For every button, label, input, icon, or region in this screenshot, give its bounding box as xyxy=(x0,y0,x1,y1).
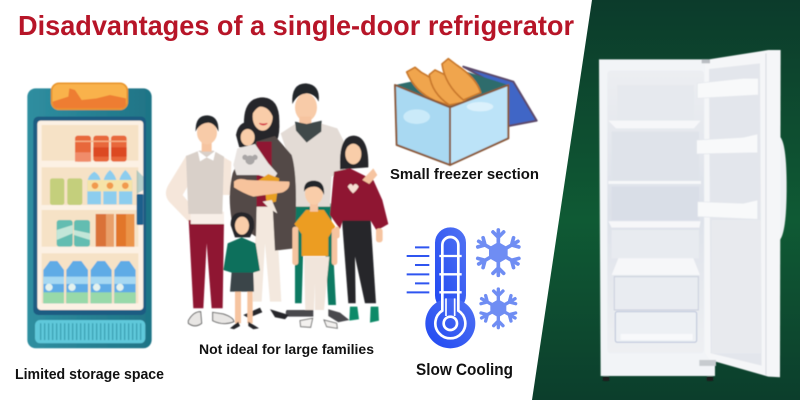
icon: thermometer and snowflakes xyxy=(407,227,521,348)
boy xyxy=(292,181,337,328)
label: slow cooling: Slow Cooling xyxy=(416,361,513,379)
orange cartons xyxy=(96,214,134,247)
icon: freezer box with fish xyxy=(395,59,537,165)
label: not ideal for large families: Not ideal for large families xyxy=(199,341,374,357)
fish xyxy=(407,59,481,105)
man on the left xyxy=(166,115,234,326)
cabinet xyxy=(599,59,715,376)
mother xyxy=(230,97,296,319)
small girl xyxy=(223,212,260,329)
door handle xyxy=(779,136,787,241)
door bins xyxy=(697,78,758,219)
baby xyxy=(233,122,289,213)
father xyxy=(281,83,349,322)
small snowflake xyxy=(479,289,517,328)
interior xyxy=(607,71,704,353)
large snowflake xyxy=(476,230,521,275)
cold lines xyxy=(407,247,429,292)
fridge feet xyxy=(603,377,713,381)
label: limited storage: Limited storage space xyxy=(15,367,164,383)
crisper drawers xyxy=(614,277,698,342)
milk cartons xyxy=(43,261,136,303)
box left face xyxy=(395,85,450,165)
thermometer xyxy=(425,227,475,348)
box right face xyxy=(450,85,508,165)
red cans xyxy=(75,136,127,162)
door xyxy=(705,50,781,377)
open lid xyxy=(463,67,537,126)
panel: green background xyxy=(532,0,800,400)
photo: open single-door refrigerator xyxy=(599,50,787,381)
label: small freezer section: Small freezer section xyxy=(390,167,539,183)
door handle xyxy=(137,194,143,225)
shelves xyxy=(608,121,701,275)
icon: display fridge xyxy=(27,83,152,348)
right girl xyxy=(330,136,388,323)
title: Disadvantages of a single-door refrigerator xyxy=(18,10,574,41)
hinge xyxy=(699,360,716,366)
juice bottles xyxy=(87,170,132,204)
olive cans xyxy=(50,178,82,205)
vent grille xyxy=(35,320,145,343)
teal cans xyxy=(57,220,90,247)
illustration: family xyxy=(166,83,388,329)
